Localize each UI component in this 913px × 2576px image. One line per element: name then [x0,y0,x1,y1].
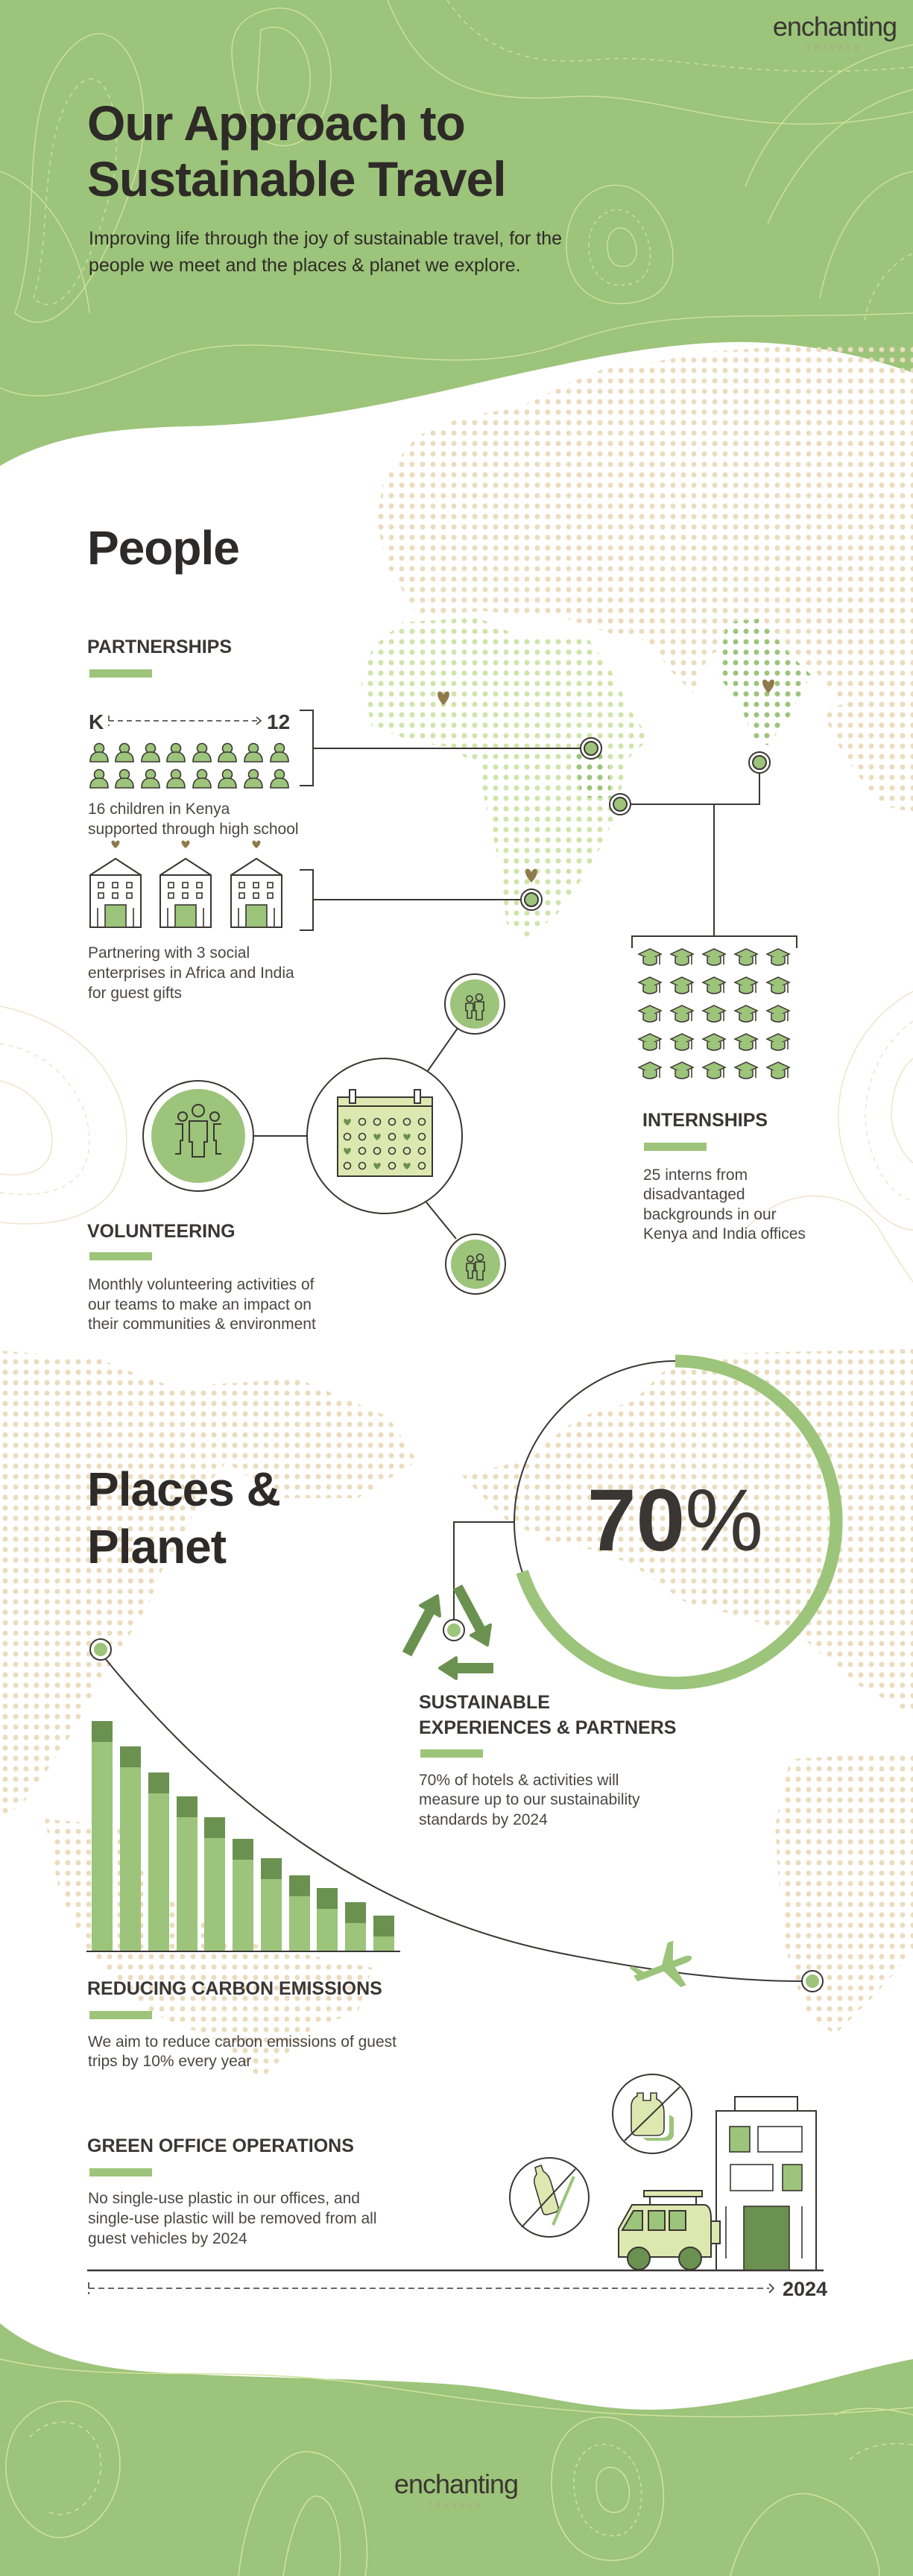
panel: volunteering: VOLUNTEERING [87,1221,236,1242]
panel: reducing carbon emissions: REDUCING CARBON EMISSIONS [87,1978,382,1999]
connector: ring to recycle [454,1522,514,1620]
K to 12 arrow: 12 [267,710,290,733]
icon: buildings [90,841,282,927]
panel: internships [642,1110,806,1243]
subtitle: Improving life through the joy of sustainable travel, for the [89,228,562,249]
panel: reducing carbon emissions: trips by 10% every year [88,2053,251,2070]
panel: sustainable experiences: 70% of hotels & activities will [419,1772,619,1789]
icon: no plastic bottle [510,2158,589,2237]
icon: no plastic bag [613,2074,692,2153]
icon grid: graduation caps [639,949,789,1079]
panel: partnerships: supported through high school [88,821,299,838]
panel: green office operations: single-use plastic will be removed from all [88,2210,377,2227]
icon: office building [716,2097,816,2270]
panel: internships: Kenya and India offices [643,1225,806,1243]
panel: internships: INTERNSHIPS [642,1110,768,1131]
heading: People: People [87,521,239,575]
panel: green office operations: GREEN OFFICE OPERATIONS [87,2135,354,2156]
panel: internships: disadvantaged [643,1186,745,1203]
flight path curve [90,1639,823,1992]
panel: partnerships: PARTNERSHIPS [87,637,232,657]
world map places section [0,1349,913,2080]
connector: south africa [300,870,542,930]
panel: sustainable experiences: measure up to our sustainability [419,1791,640,1808]
panel: partnerships: 16 children in Kenya [88,801,230,818]
panel: green office operations: No single-use plastic in our offices, and [88,2190,360,2207]
heading: Places & Planet: Places & [87,1462,280,1516]
chart: 70% ring: 70% [587,1471,763,1570]
logo bottom: TRAVELS [428,2501,484,2509]
icon grid: 16 children [90,744,288,788]
panel: volunteering [87,1221,316,1333]
panel: reducing carbon emissions [87,1978,397,2070]
chart: carbon bars [86,1721,400,1951]
panel: sustainable experiences [419,1692,676,1828]
icon: van [619,2191,720,2270]
icon: group of people [175,1105,221,1157]
icon: airplane [625,1936,700,2001]
panel: volunteering: their communities & environment [88,1316,316,1333]
panel: internships: 25 interns from [643,1167,748,1184]
logo top: TRAVELS [806,44,863,51]
panel: sustainable experiences: EXPERIENCES & PARTNERS [419,1717,676,1738]
K to 12 arrow: K [89,710,104,733]
icon: recycle [407,1587,493,1679]
title [87,95,506,206]
connector: kenya [300,710,601,786]
heading: Places & Planet [87,1462,280,1573]
timeline to 2024: 2024 [783,2278,827,2300]
panel: partnerships: Partnering with 3 social [88,944,250,962]
panel: volunteering: our teams to make an impact on [88,1296,312,1313]
panel: volunteering: Monthly volunteering activities of [88,1276,315,1293]
panel: partnerships: enterprises in Africa and India [88,965,294,982]
logo bottom: enchanting [394,2469,518,2499]
icon: heart africa [437,692,449,705]
footer green background [0,2323,913,2576]
K to 12 arrow [89,710,290,733]
title: Sustainable Travel [87,151,506,206]
panel: sustainable experiences: SUSTAINABLE [419,1692,550,1713]
chart: 70% ring [514,1361,836,1683]
icon: heart india [762,680,774,693]
panel: green office operations [87,2135,377,2247]
connector: offices to internships [610,752,797,948]
subtitle: people we meet and the places & planet we explore. [89,255,521,276]
panel: partnerships [87,637,601,1002]
logo top: enchanting [773,11,897,42]
icon: calendar [338,1090,432,1176]
timeline to 2024 [87,2270,827,2300]
subtitle [89,228,562,276]
heading: Places & Planet: Planet [87,1520,227,1573]
world map people section [361,343,913,938]
panel: partnerships: for guest gifts [88,985,182,1002]
panel: internships: backgrounds in our [643,1206,777,1223]
header green background [0,0,913,466]
icon: heart south africa [525,869,537,883]
title: Our Approach to [87,95,465,151]
diagram: volunteering circles [143,974,505,1294]
panel: green office operations: guest vehicles by 2024 [88,2230,247,2247]
panel: sustainable experiences: standards by 2024 [419,1811,548,1828]
decorative contours middle [0,991,913,1282]
panel: reducing carbon emissions: We aim to reduce carbon emissions of guest [88,2033,397,2051]
